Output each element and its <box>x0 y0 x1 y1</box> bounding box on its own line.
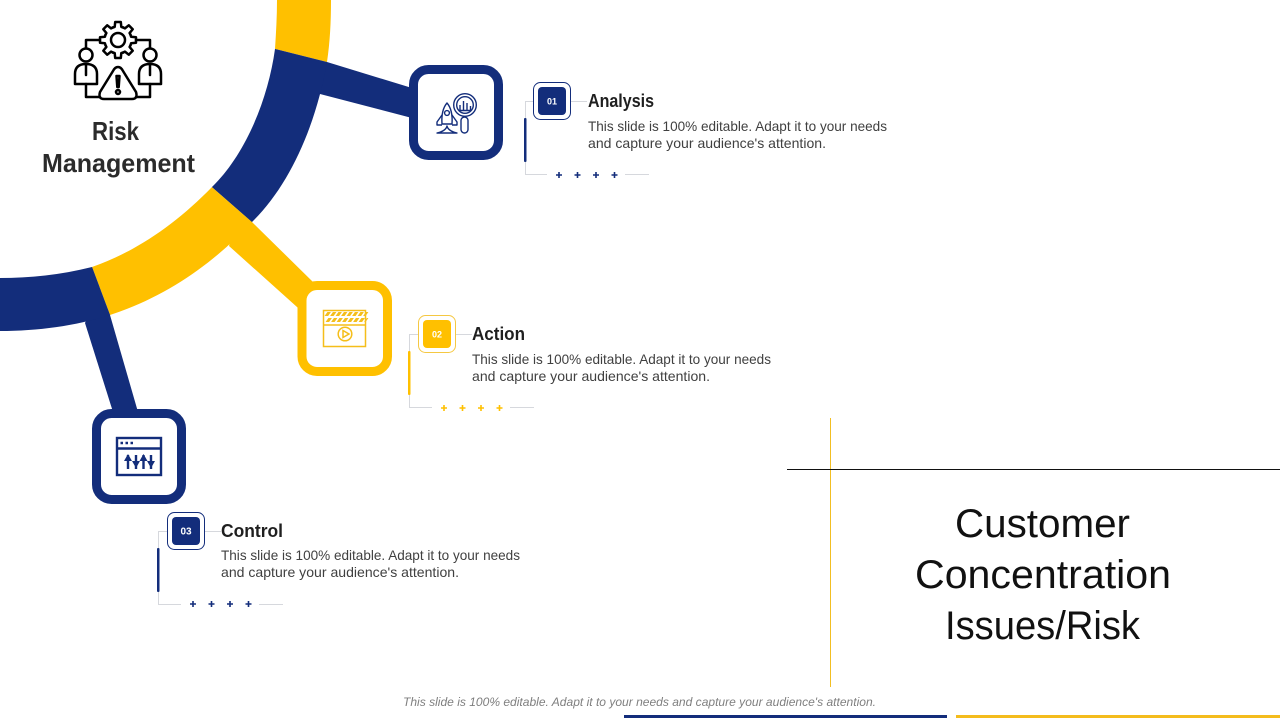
heading: risk management: Risk <box>92 116 139 146</box>
step: action <box>408 316 771 411</box>
step: analysis <box>524 82 887 178</box>
ring segment: navy bottom <box>0 267 110 331</box>
ring segment: yellow top <box>275 0 331 62</box>
title: Issues/Risk <box>945 604 1141 648</box>
heading: risk management: Management <box>42 148 195 178</box>
step text <box>472 351 771 384</box>
heading: risk management <box>42 116 195 178</box>
number badge 01 <box>534 82 570 120</box>
step text: and capture your audience's attention. <box>472 368 710 384</box>
icon: browser sliders <box>117 438 161 475</box>
step text <box>588 118 887 151</box>
footer bar: yellow <box>956 715 1280 718</box>
step: control <box>157 512 520 607</box>
panel: ring diagram <box>0 0 412 412</box>
number badge 03 <box>168 512 204 550</box>
step text: This slide is 100% editable. Adapt it to your needs <box>588 118 887 134</box>
footer note: This slide is 100% editable. Adapt it to your needs and capture your audience's attention. <box>403 695 876 709</box>
leader lines <box>410 334 534 408</box>
plus markers <box>441 405 502 411</box>
icon: clapperboard with play button <box>324 310 367 346</box>
ring segment: yellow lower <box>92 187 252 315</box>
accent bar <box>157 548 160 592</box>
accent bar <box>408 351 410 395</box>
accent bar <box>524 118 526 162</box>
leader lines <box>158 532 283 604</box>
icon box: analysis <box>414 70 498 156</box>
step text: and capture your audience's attention. <box>221 564 459 580</box>
ring segment: navy upper <box>212 48 327 222</box>
step heading: Action <box>472 324 525 344</box>
plus markers <box>556 172 618 178</box>
title: Concentration <box>915 553 1171 597</box>
step heading: Control <box>221 521 283 541</box>
step text: and capture your audience's attention. <box>588 135 826 151</box>
leader lines <box>526 102 649 174</box>
number badge 01: 01 <box>547 96 557 106</box>
title <box>915 502 1171 648</box>
number badge 02: 02 <box>432 330 442 340</box>
number badge 02 <box>418 316 456 352</box>
step text: This slide is 100% editable. Adapt it to your needs <box>221 547 520 563</box>
number badge 03: 03 <box>180 526 192 538</box>
step heading: Analysis <box>588 91 654 111</box>
connector: navy to analysis <box>290 62 412 118</box>
step text: This slide is 100% editable. Adapt it to your needs <box>472 351 771 367</box>
icon box: control <box>96 414 182 500</box>
plus markers <box>190 601 252 607</box>
footer bar: navy <box>624 715 947 718</box>
icon box: action <box>302 286 388 372</box>
icon: risk management <box>75 22 161 99</box>
step text <box>221 547 520 580</box>
icon: rocket and magnifier <box>437 94 476 133</box>
connector: navy to control <box>85 290 138 412</box>
title: Customer <box>955 502 1130 546</box>
connector: yellow to action <box>229 212 313 312</box>
